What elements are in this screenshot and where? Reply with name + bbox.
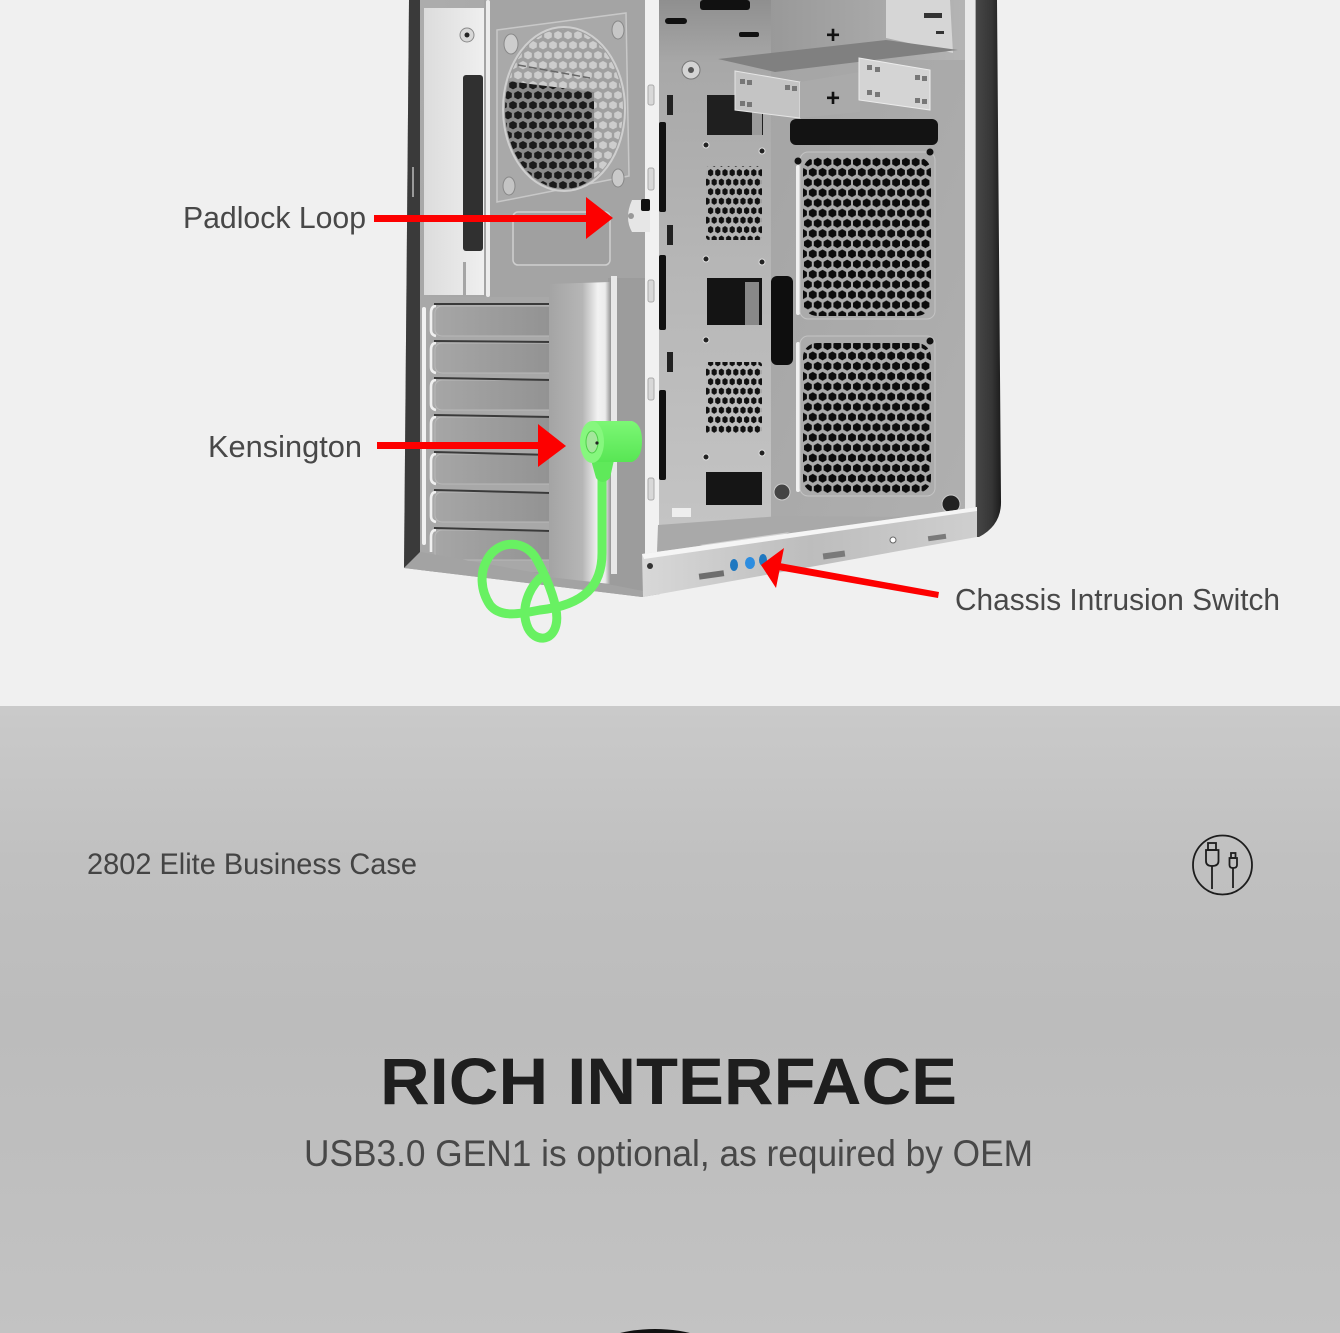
title: RICH INTERFACE xyxy=(380,1044,957,1118)
label: Padlock Loop: Padlock Loop xyxy=(183,200,366,235)
label: Kensington: Kensington xyxy=(208,429,362,464)
small hex vent: lower xyxy=(706,362,762,434)
small hex vent: upper xyxy=(706,166,762,240)
case bottom chamfer xyxy=(404,552,645,597)
fan grille xyxy=(503,27,625,192)
panel: top light section xyxy=(0,0,1340,706)
expansion slot covers xyxy=(421,303,549,572)
large hex vent: lower xyxy=(800,336,935,496)
product top edge at page bottom xyxy=(593,1329,717,1333)
subtitle: USB3.0 GEN1 is optional, as required by OEM xyxy=(304,1133,1033,1174)
case right dark side panel xyxy=(970,0,1001,537)
arrow: chassis intrusion switch xyxy=(761,548,939,598)
drive bays xyxy=(665,0,958,118)
case rear panel xyxy=(404,0,660,597)
label: Chassis Intrusion Switch: Chassis Intrusion Switch xyxy=(955,582,1280,617)
front white rail: left xyxy=(645,0,666,590)
Kensington lock and green cable xyxy=(482,421,642,638)
fan mount bracket xyxy=(497,13,629,202)
drive bays: + xyxy=(826,22,840,49)
case floor xyxy=(657,508,930,553)
arrow: Kensington xyxy=(377,424,566,467)
padlock loop tab xyxy=(628,199,650,232)
large hex vent: upper xyxy=(800,152,935,319)
drive bays: + xyxy=(826,85,840,112)
silver expansion cover bar xyxy=(549,282,610,584)
panel: bottom gray section xyxy=(0,706,1340,1333)
lower rear panel xyxy=(608,278,648,592)
product name: 2802 Elite Business Case xyxy=(87,848,417,881)
interior HDD plate xyxy=(658,0,773,530)
bottom front rail xyxy=(642,507,977,597)
interior right wall xyxy=(771,0,976,530)
front white rail: right xyxy=(965,0,975,512)
product photo: computer case rear view xyxy=(404,0,1001,638)
arrow: padlock loop xyxy=(374,197,613,239)
icon: USB cables xyxy=(1193,836,1252,894)
